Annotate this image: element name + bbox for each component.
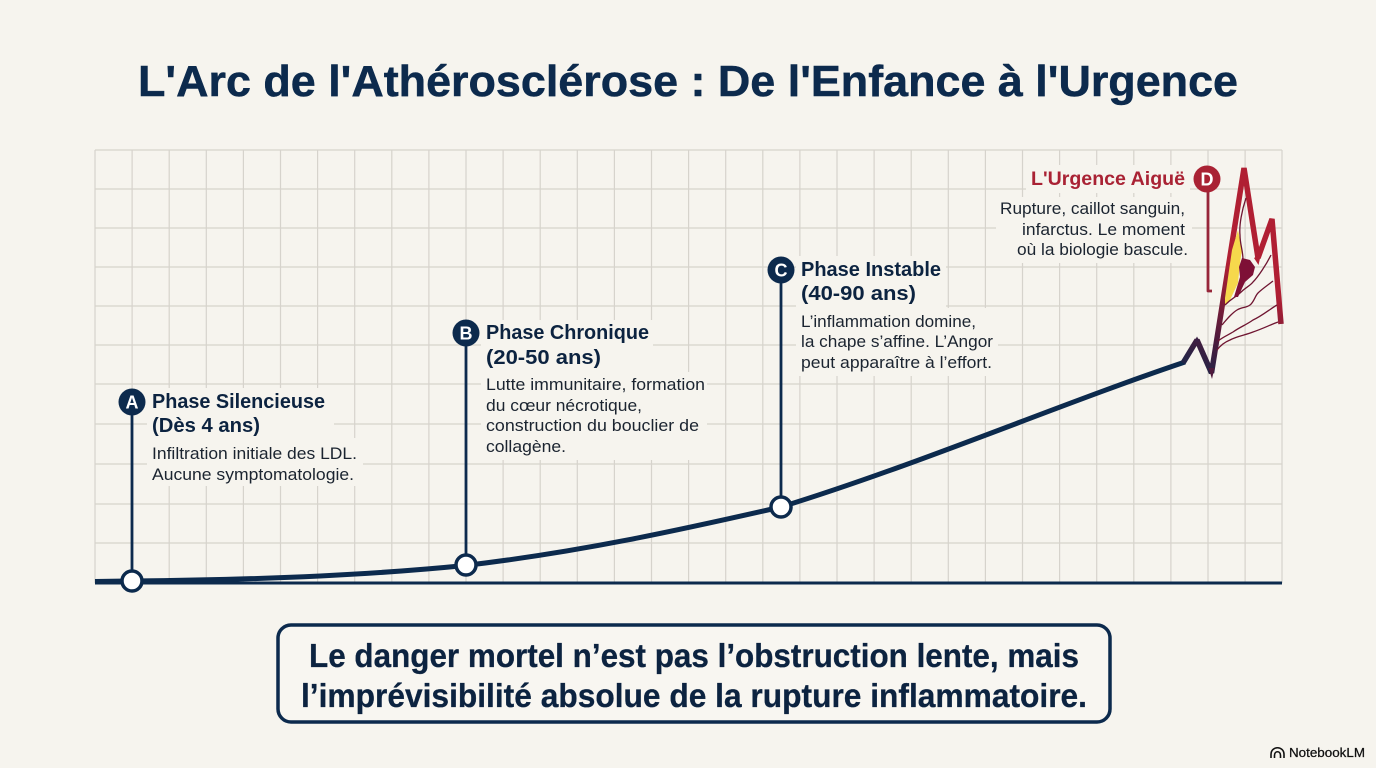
NotebookLM logo: NotebookLM <box>1289 745 1365 760</box>
marker B: B <box>460 324 472 344</box>
text masks <box>147 165 1192 486</box>
phase D text: Rupture, caillot sanguin, <box>1000 199 1185 218</box>
marker A <box>118 388 146 591</box>
phase C text <box>801 258 993 372</box>
phase D text <box>1000 168 1188 259</box>
icon: NotebookLM arcs <box>1271 748 1284 758</box>
lipid core <box>1225 230 1242 305</box>
phase B text: (20-50 ans) <box>486 346 601 369</box>
phase C text: la chape s’affine. L’Angor <box>801 332 993 351</box>
plaque rupture illustration <box>1217 198 1278 350</box>
phase D text: où la biologie bascule. <box>1017 240 1188 259</box>
risk curve <box>95 168 1281 582</box>
marker C: C <box>774 260 788 280</box>
phase D text: infarctus. Le moment <box>1022 220 1185 239</box>
phase B text: Lutte immunitaire, formation <box>486 375 705 394</box>
phase A text: Infiltration initiale des LDL. <box>152 444 357 463</box>
title: L'Arc de l'Athérosclérose : De l'Enfance à l'Urgence <box>138 57 1238 106</box>
callout: Le danger mortel n’est pas l’obstruction lente, mais <box>309 637 1079 674</box>
phase C text: Phase Instable <box>801 258 941 281</box>
marker A: A <box>126 392 138 412</box>
marker D: D <box>1200 170 1214 190</box>
phase B text <box>486 321 705 456</box>
baseline axis <box>95 582 1282 584</box>
callout: l’imprévisibilité absolue de la rupture inflammatoire. <box>301 677 1087 714</box>
phase A text: Phase Silencieuse <box>152 390 325 413</box>
phase B text: Phase Chronique <box>486 321 649 344</box>
phase A text: (Dès 4 ans) <box>152 414 260 437</box>
phase A text <box>152 390 357 484</box>
phase C text: L’inflammation domine, <box>801 312 976 331</box>
phase C text: peut apparaître à l’effort. <box>801 353 992 372</box>
tissue lines <box>1217 198 1278 350</box>
phase D text: L'Urgence Aiguë <box>1031 168 1185 190</box>
phase A text: Aucune symptomatologie. <box>152 465 354 484</box>
phase B text: collagène. <box>486 437 566 456</box>
phase C text: (40-90 ans) <box>801 282 916 305</box>
stems <box>132 179 1212 581</box>
phase B text: construction du bouclier de <box>486 416 699 435</box>
marker C <box>768 256 794 517</box>
callout <box>278 625 1110 722</box>
marker D <box>1194 166 1220 192</box>
phase B text: du cœur nécrotique, <box>486 396 642 415</box>
blood clot <box>1234 258 1255 297</box>
marker B <box>452 320 480 575</box>
